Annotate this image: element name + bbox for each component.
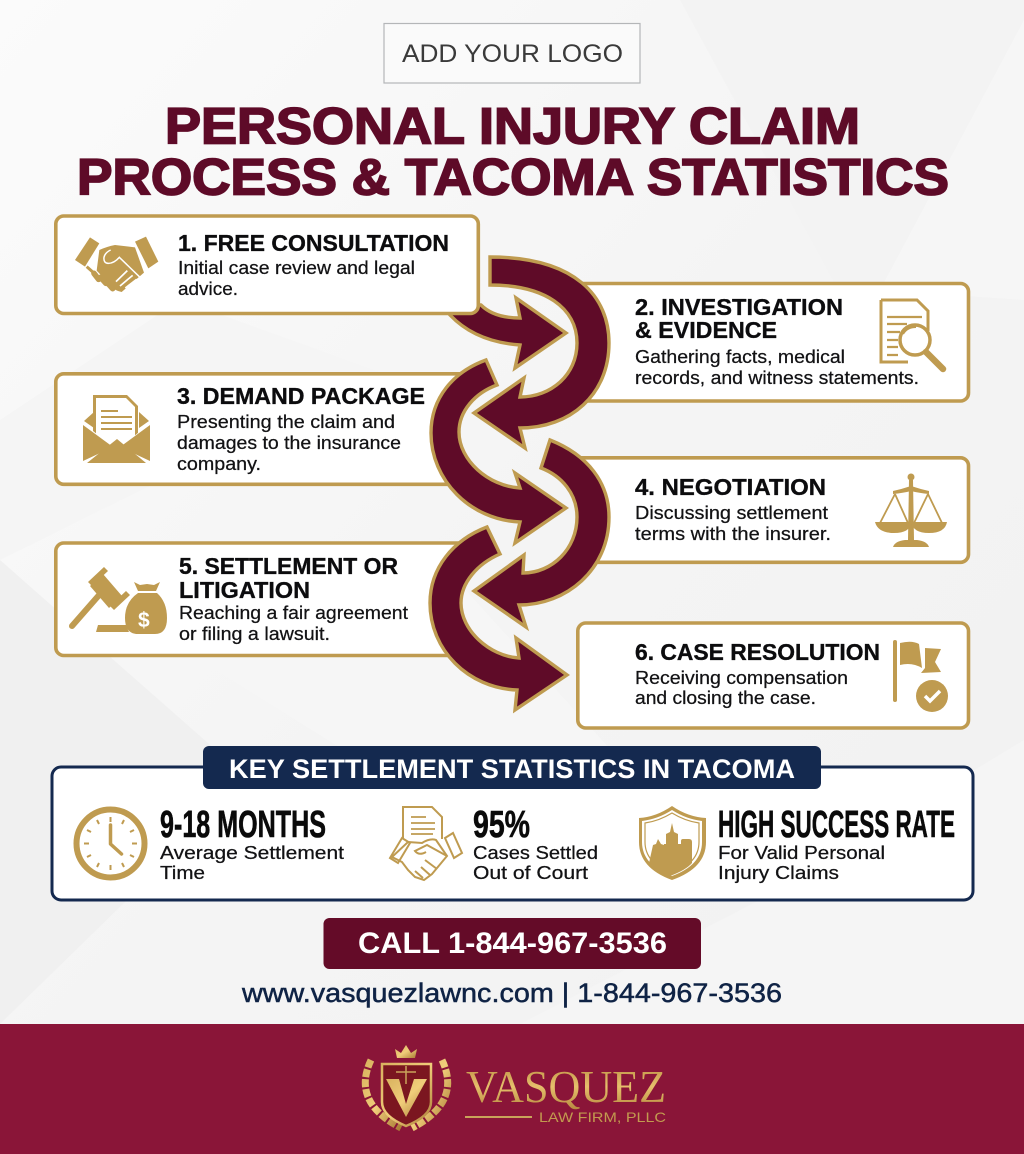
firm logo emblem [365, 1045, 448, 1128]
logo placeholder [384, 24, 640, 83]
icon: flag with check [893, 640, 948, 712]
card: step 5 settlement or litigation: or filing a lawsuit. [179, 623, 330, 644]
stat: average time: Average Settlement [160, 842, 344, 863]
arrow: step 4 to step 5 [474, 440, 609, 627]
icon: document and magnifier [881, 300, 943, 369]
card: step 3 demand package: 3. DEMAND PACKAGE [177, 383, 425, 409]
card: step 4 negotiation: terms with the insurer. [635, 523, 831, 544]
title: PERSONAL INJURY CLAIM [165, 98, 860, 154]
laurels [365, 1060, 448, 1128]
icon: gavel and money bag: $ [138, 609, 150, 632]
card: step 4 negotiation [566, 458, 968, 562]
stat: high success rate [639, 804, 955, 883]
card: step 4 negotiation: 4. NEGOTIATION [635, 474, 826, 500]
card: step 6 case resolution: 6. CASE RESOLUTION [635, 639, 880, 665]
stat: average time [76, 804, 344, 883]
firm name: VASQUEZ [466, 1061, 666, 1112]
card: step 3 demand package [56, 374, 478, 484]
icon: envelope with letter [83, 395, 150, 463]
icon: handshake [75, 237, 158, 292]
stat: average time: 9-18 MONTHS [160, 804, 326, 846]
footer band [0, 1024, 1024, 1154]
stat: settled out of court: Cases Settled [473, 842, 598, 863]
stat: settled out of court: Out of Court [473, 862, 588, 883]
heading tab: KEY SETTLEMENT STATISTICS IN TACOMA [229, 754, 795, 784]
call button [324, 918, 701, 969]
title: PROCESS & TACOMA STATISTICS [77, 148, 949, 206]
card: step 3 demand package: company. [177, 453, 261, 474]
card: step 5 settlement or litigation: LITIGATION [179, 577, 310, 603]
stat: settled out of court: 95% [473, 804, 530, 846]
icon: scales of justice [875, 474, 947, 547]
arrow: step 2 to step 3 [474, 257, 609, 448]
icon: gavel and money bag [72, 567, 167, 634]
card: step 1 free consultation: 1. FREE CONSULTATION [178, 230, 449, 256]
title [77, 98, 949, 206]
V mark [386, 1079, 427, 1117]
card: step 3 demand package: damages to the insurance [177, 432, 401, 453]
card: step 1 free consultation [56, 216, 478, 314]
arrow: step 3 to step 4 [431, 360, 566, 543]
card: step 4 negotiation: Discussing settlement [635, 502, 828, 523]
stat: settled out of court [390, 804, 598, 883]
heading tab [203, 746, 821, 789]
card: step 6 case resolution: Receiving compensation [635, 667, 848, 688]
crown [395, 1045, 417, 1058]
card: step 2 investigation and evidence: 2. INVESTIGATION [635, 294, 843, 320]
card: step 3 demand package: Presenting the claim and [177, 411, 395, 432]
card: step 6 case resolution [578, 623, 968, 728]
card: step 5 settlement or litigation: Reaching a fair agreement [179, 602, 408, 623]
card: step 6 case resolution: and closing the case. [635, 687, 816, 708]
call button: CALL 1-844-967-3536 [358, 927, 667, 960]
card: step 5 settlement or litigation [56, 543, 480, 656]
card: step 1 free consultation: advice. [178, 278, 238, 299]
icon: document and handshake outline [390, 807, 462, 880]
stat: high success rate: For Valid Personal [718, 842, 885, 863]
icon: clock [76, 810, 144, 878]
card: step 2 investigation and evidence: & EVIDENCE [635, 317, 777, 343]
card: step 2 investigation and evidence [570, 284, 968, 401]
panel: key settlement statistics [52, 746, 973, 900]
stat: high success rate: Injury Claims [718, 862, 839, 883]
contact line: www.vasquezlawnc.com | 1-844-967-3536 [241, 978, 782, 1008]
firm name: LAW FIRM, PLLC [539, 1109, 666, 1125]
logo placeholder: ADD YOUR LOGO [402, 40, 623, 68]
card: step 2 investigation and evidence: Gathering facts, medical [635, 346, 845, 367]
icon: city shield [639, 806, 706, 880]
card: step 5 settlement or litigation: 5. SETTLEMENT OR [179, 553, 398, 579]
stat: average time: Time [160, 862, 205, 883]
card: step 1 free consultation: Initial case review and legal [178, 257, 415, 278]
arrow: step 5 to step 6 [430, 527, 567, 710]
shield [382, 1064, 431, 1126]
arrow: step 1 to step 2 [440, 298, 566, 368]
card: step 2 investigation and evidence: records, and witness statements. [635, 367, 919, 388]
